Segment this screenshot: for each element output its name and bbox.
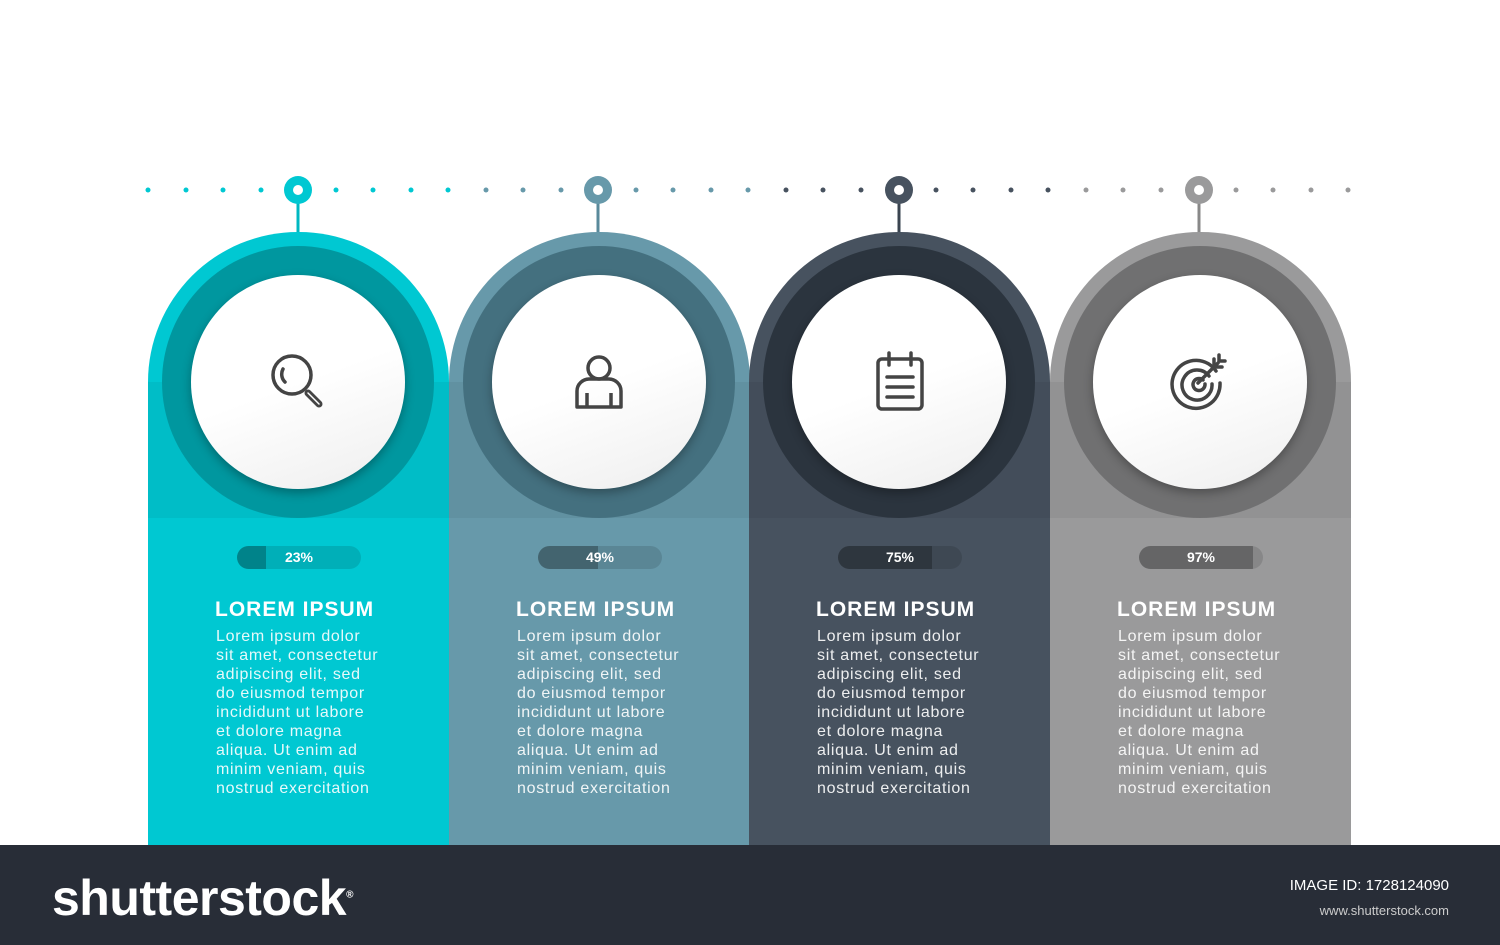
panel 4 [1050,232,1351,845]
text: minim veniam, quis [517,761,667,778]
text: sit amet, consectetur [517,647,679,664]
image id: www.shutterstock.com [1320,903,1449,918]
panel 3 [749,232,1050,845]
text [1118,628,1280,797]
panel 2 [449,232,750,845]
text: do eiusmod tempor [517,685,666,702]
progress 97% [1139,546,1263,569]
footer logo: shutterstock® [52,870,353,926]
text: minim veniam, quis [817,761,967,778]
text: et dolore magna [817,723,943,740]
progress 23% [237,546,361,569]
progress 49% [538,546,662,569]
progress 49%: 49% [586,549,614,565]
text: et dolore magna [1118,723,1244,740]
heading: LOREM IPSUM [215,598,374,621]
text [817,628,979,797]
text: sit amet, consectetur [216,647,378,664]
pin 3 [885,176,913,232]
text: nostrud exercitation [817,780,971,797]
text: adipiscing elit, sed [817,666,962,683]
text: adipiscing elit, sed [216,666,361,683]
progress 75% [838,546,962,569]
progress 97%: 97% [1187,549,1215,565]
footer bar [0,845,1500,945]
image id: IMAGE ID: 1728124090 [1290,877,1449,894]
pin 1 [284,176,312,232]
text: nostrud exercitation [517,780,671,797]
text: do eiusmod tempor [1118,685,1267,702]
text: sit amet, consectetur [1118,647,1280,664]
text [517,628,679,797]
text: do eiusmod tempor [216,685,365,702]
text: et dolore magna [517,723,643,740]
pin 2 [584,176,612,232]
text: incididunt ut labore [216,704,364,721]
heading: LOREM IPSUM [816,598,975,621]
text: nostrud exercitation [1118,780,1272,797]
text: aliqua. Ut enim ad [517,742,659,759]
heading: LOREM IPSUM [516,598,675,621]
text: Lorem ipsum dolor [216,628,360,645]
text: Lorem ipsum dolor [1118,628,1262,645]
text: aliqua. Ut enim ad [1118,742,1260,759]
text: incididunt ut labore [817,704,965,721]
text: adipiscing elit, sed [1118,666,1263,683]
text: Lorem ipsum dolor [517,628,661,645]
dotted timeline [146,188,1350,192]
icon: notepad [876,351,924,411]
text: et dolore magna [216,723,342,740]
text: incididunt ut labore [1118,704,1266,721]
heading: LOREM IPSUM [1117,598,1276,621]
text: sit amet, consectetur [817,647,979,664]
text: aliqua. Ut enim ad [216,742,358,759]
pin 4 [1185,176,1213,232]
image id [1290,877,1449,918]
text: nostrud exercitation [216,780,370,797]
progress 75%: 75% [886,549,914,565]
icon: target [1170,353,1227,410]
progress 23%: 23% [285,549,313,565]
text: incididunt ut labore [517,704,665,721]
text: minim veniam, quis [216,761,366,778]
text: minim veniam, quis [1118,761,1268,778]
icon: user [575,355,623,409]
text: do eiusmod tempor [817,685,966,702]
panel 1 [148,232,449,845]
text: aliqua. Ut enim ad [817,742,959,759]
text [216,628,378,797]
icon: magnifier [271,354,322,408]
text: adipiscing elit, sed [517,666,662,683]
text: Lorem ipsum dolor [817,628,961,645]
